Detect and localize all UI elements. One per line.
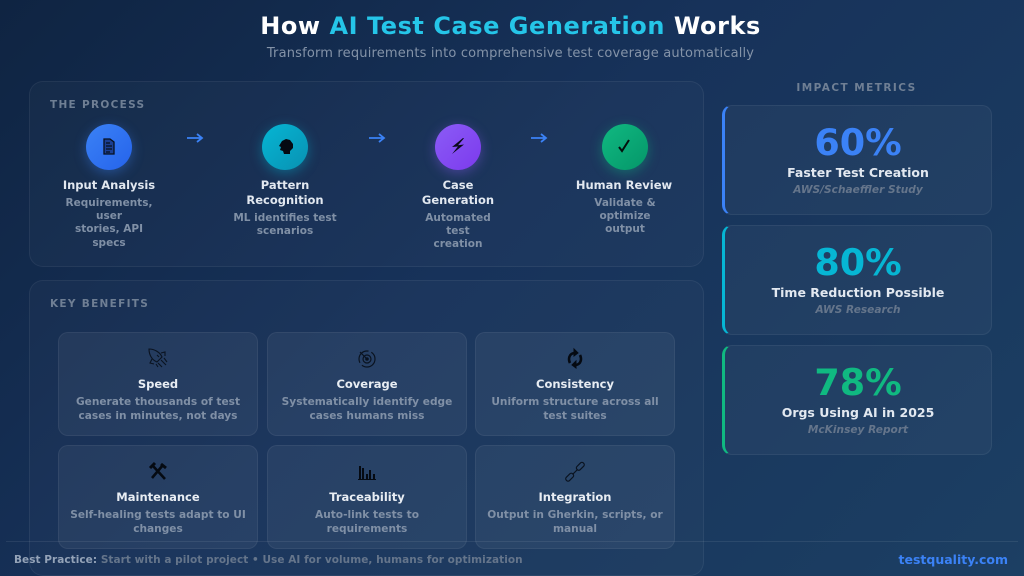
metric source: AWS Research <box>815 304 901 316</box>
step description: ML identifies test <box>233 212 337 224</box>
card description <box>491 396 659 422</box>
metric label: Faster Test Creation <box>787 164 929 180</box>
step description: output <box>605 223 645 235</box>
card description: requirements <box>327 523 407 535</box>
card description: Uniform structure across all <box>491 396 659 408</box>
card: traceability <box>267 445 467 549</box>
card title: Maintenance <box>116 490 200 504</box>
card title: Integration <box>539 490 611 504</box>
metric source: AWS/Schaeffler Study <box>793 184 923 196</box>
metric label: Orgs Using AI in 2025 <box>782 404 934 420</box>
step title: Recognition <box>246 192 324 206</box>
card description: Output in Gherkin, scripts, or <box>487 509 663 521</box>
icon: tools <box>149 462 167 480</box>
card description <box>76 396 240 422</box>
icon: cycle arrows <box>568 348 582 369</box>
icon: check mark <box>602 124 648 170</box>
card: integration <box>475 445 675 549</box>
step description <box>66 196 152 249</box>
step description <box>594 196 656 235</box>
metric value: 60% <box>814 121 902 164</box>
icon: document <box>86 124 132 170</box>
metric source: McKinsey Report <box>808 424 908 436</box>
footer: website: testquality.com <box>899 552 1008 567</box>
icon: target <box>358 350 376 368</box>
metric: 80% <box>722 225 992 335</box>
card description: Self-healing tests adapt to UI <box>70 509 246 521</box>
arrow <box>369 133 386 143</box>
step description <box>425 212 491 250</box>
card description: cases in minutes, not days <box>78 410 237 422</box>
card description: cases humans miss <box>309 410 424 422</box>
heading: impact metrics: IMPACT METRICS <box>796 82 917 94</box>
card title: Consistency <box>536 376 614 390</box>
heading: the process: THE PROCESS <box>50 98 145 110</box>
card: maintenance <box>58 445 258 549</box>
metric: 60% <box>722 105 992 215</box>
step description: specs <box>92 237 126 249</box>
card description: Systematically identify edge <box>282 396 452 408</box>
step title <box>246 178 324 206</box>
step description: creation <box>434 238 482 250</box>
card: consistency <box>475 332 675 436</box>
step description: Requirements, <box>66 196 152 208</box>
heading: key benefits: KEY BENEFITS <box>50 298 149 310</box>
icon: chain link <box>565 462 585 482</box>
step description <box>233 212 337 237</box>
metric label: Time Reduction Possible <box>772 284 944 300</box>
step: pattern recognition <box>233 122 337 237</box>
step description: test <box>446 225 470 237</box>
metric: 78% <box>722 345 992 455</box>
icon: bar chart <box>358 466 376 480</box>
card description: Generate thousands of test <box>76 396 240 408</box>
card: speed <box>58 332 258 436</box>
card description: changes <box>133 523 183 535</box>
card description: test suites <box>543 410 607 422</box>
card description <box>487 509 663 535</box>
card description <box>315 509 419 535</box>
step title <box>422 178 494 206</box>
metric value: 78% <box>814 361 902 404</box>
card: coverage <box>267 332 467 436</box>
card description <box>70 509 246 535</box>
step title: Human Review <box>576 178 672 192</box>
step description: user <box>96 210 122 222</box>
footer: best practice: Best Practice: Start with a pilot project • Use AI for volume, humans for optimization <box>14 554 523 566</box>
step description: optimize <box>599 210 651 222</box>
step title: Generation <box>422 192 494 206</box>
card description: manual <box>553 523 597 535</box>
icon: brain head <box>262 124 308 170</box>
card description <box>282 396 452 422</box>
title: How AI Test Case Generation Works <box>260 12 761 40</box>
card title: Speed <box>138 376 178 390</box>
card title: Coverage <box>336 376 398 390</box>
step title: Case <box>443 178 473 192</box>
subtitle: Transform requirements into comprehensive test coverage automatically <box>267 46 754 61</box>
step: input analysis <box>63 121 155 249</box>
step description: stories, API <box>75 223 143 235</box>
metric value: 80% <box>814 241 902 284</box>
step title: Input Analysis <box>63 178 155 192</box>
card title: Traceability <box>329 490 405 504</box>
step description: Automated <box>425 212 491 224</box>
panel: the process <box>29 81 704 267</box>
step: case generation <box>422 122 494 250</box>
step description: Validate & <box>594 196 656 208</box>
card description: Auto-link tests to <box>315 509 419 521</box>
panel: key benefits <box>29 280 704 576</box>
arrow <box>531 133 548 143</box>
step description: scenarios <box>257 225 313 237</box>
arrow <box>187 133 204 143</box>
icon: lightning <box>435 124 481 170</box>
icon: rocket <box>148 348 168 368</box>
step title: Pattern <box>261 178 309 192</box>
step: human review <box>576 122 672 235</box>
